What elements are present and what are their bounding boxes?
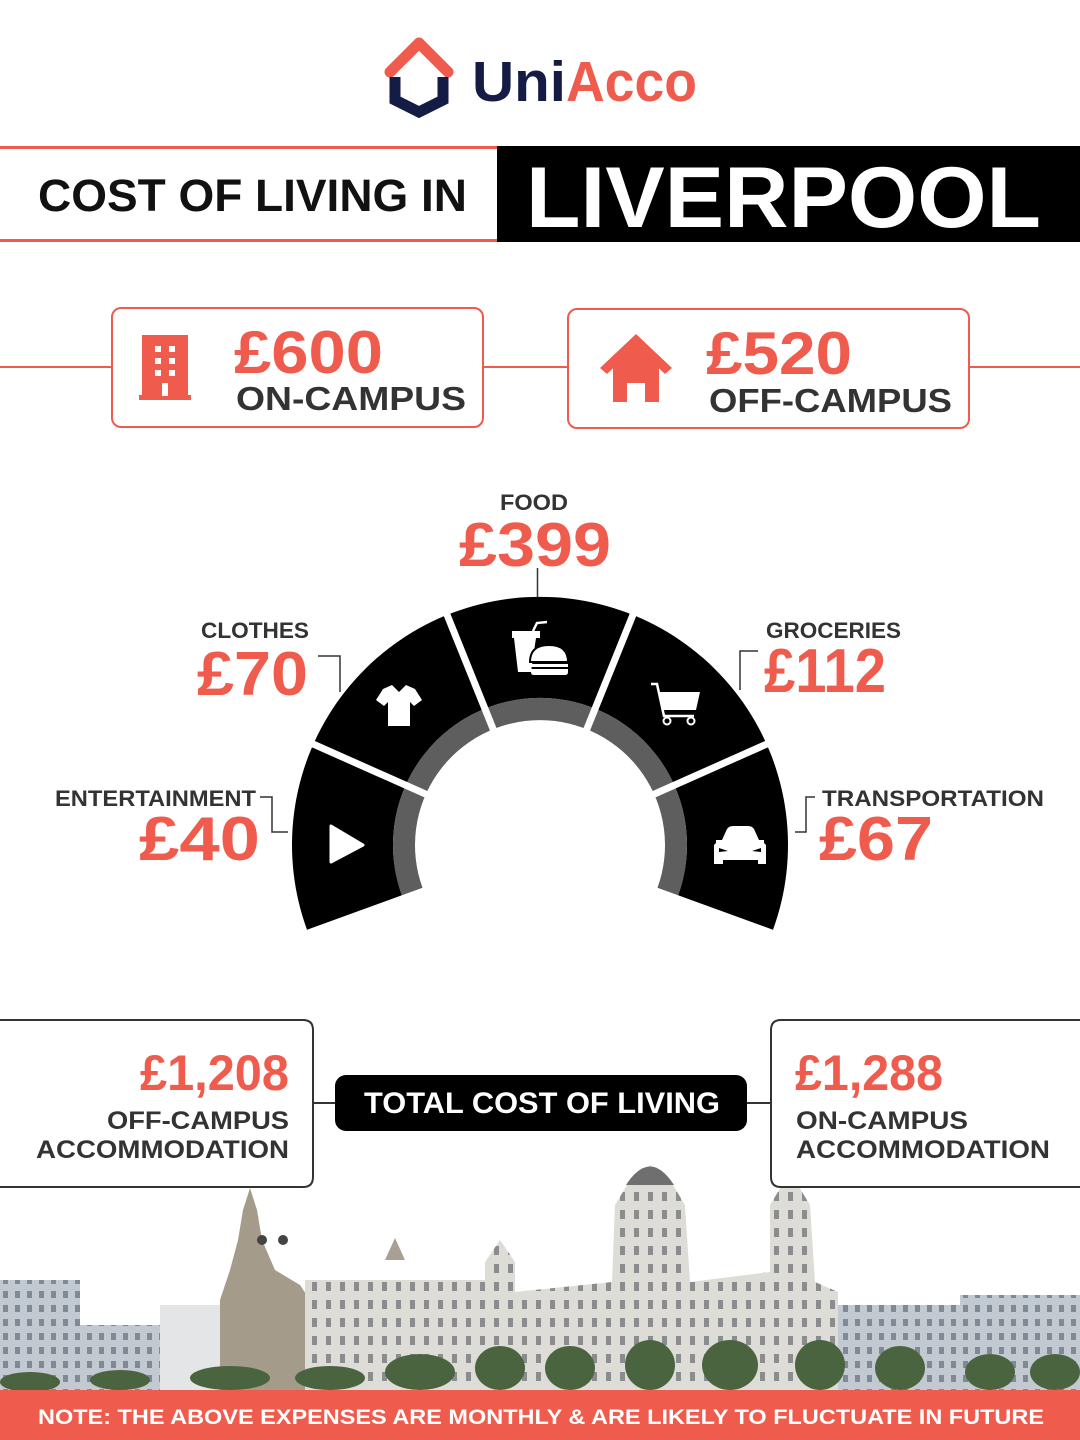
title band — [0, 146, 1080, 246]
icon: house — [600, 334, 672, 402]
label: groceries: £112 — [764, 637, 886, 706]
title band: COST OF LIVING IN — [38, 170, 467, 221]
label: food: FOOD — [500, 490, 568, 515]
footer note — [0, 1390, 1080, 1440]
icon: logo house — [390, 43, 448, 112]
label: food: £399 — [459, 511, 611, 580]
panel: on-campus rent: £600 — [234, 319, 383, 386]
label: transportation: TRANSPORTATION — [822, 786, 1044, 811]
skyline illustration — [0, 1165, 1080, 1392]
panel: total off-campus — [0, 1020, 313, 1187]
panel: total on-campus: ON-CAMPUS — [796, 1107, 968, 1135]
icon: play — [331, 826, 363, 862]
accommodation connector line — [0, 366, 1080, 368]
total cost of living pill: TOTAL COST OF LIVING — [364, 1087, 720, 1120]
label: food — [459, 490, 611, 597]
panel: off-campus rent — [568, 309, 969, 428]
panel: on-campus rent: ON-CAMPUS — [236, 380, 466, 417]
icon: cart — [651, 684, 700, 724]
logo — [390, 43, 697, 114]
panel: total on-campus — [771, 1020, 1080, 1187]
total cost of living pill — [335, 1075, 747, 1131]
logo: Acco — [566, 50, 697, 114]
title band: LIVERPOOL — [526, 150, 1041, 246]
panel: total off-campus: OFF-CAMPUS — [107, 1107, 289, 1135]
label: entertainment: £40 — [139, 805, 260, 874]
panel: total off-campus: £1,208 — [140, 1045, 289, 1101]
label: transportation — [795, 786, 1044, 874]
panel: total on-campus: ACCOMMODATION — [796, 1136, 1050, 1164]
panel: off-campus rent: £520 — [706, 320, 852, 387]
panel: total off-campus: ACCOMMODATION — [36, 1136, 289, 1164]
label: clothes — [197, 618, 340, 709]
icon: car — [714, 826, 766, 864]
icon: t-shirt — [376, 685, 422, 726]
icon: building — [139, 335, 191, 400]
label: groceries — [740, 618, 901, 706]
panel: total on-campus: £1,288 — [795, 1045, 943, 1101]
label: entertainment: ENTERTAINMENT — [55, 786, 257, 811]
totals connector line — [300, 1102, 780, 1104]
footer note: NOTE: THE ABOVE EXPENSES ARE MONTHLY & ARE LIKELY TO FLUCTUATE IN FUTURE — [38, 1406, 1044, 1429]
panel: off-campus rent: OFF-CAMPUS — [709, 382, 952, 419]
label: clothes: £70 — [197, 640, 308, 709]
label: entertainment — [55, 786, 288, 874]
label: transportation: £67 — [819, 805, 933, 874]
panel: on-campus rent — [112, 308, 483, 427]
label: clothes: CLOTHES — [201, 618, 309, 643]
label: groceries: GROCERIES — [766, 618, 901, 643]
icon: food — [512, 622, 568, 675]
chart: expenses semicircle — [292, 597, 788, 930]
logo: Uni — [472, 50, 566, 114]
